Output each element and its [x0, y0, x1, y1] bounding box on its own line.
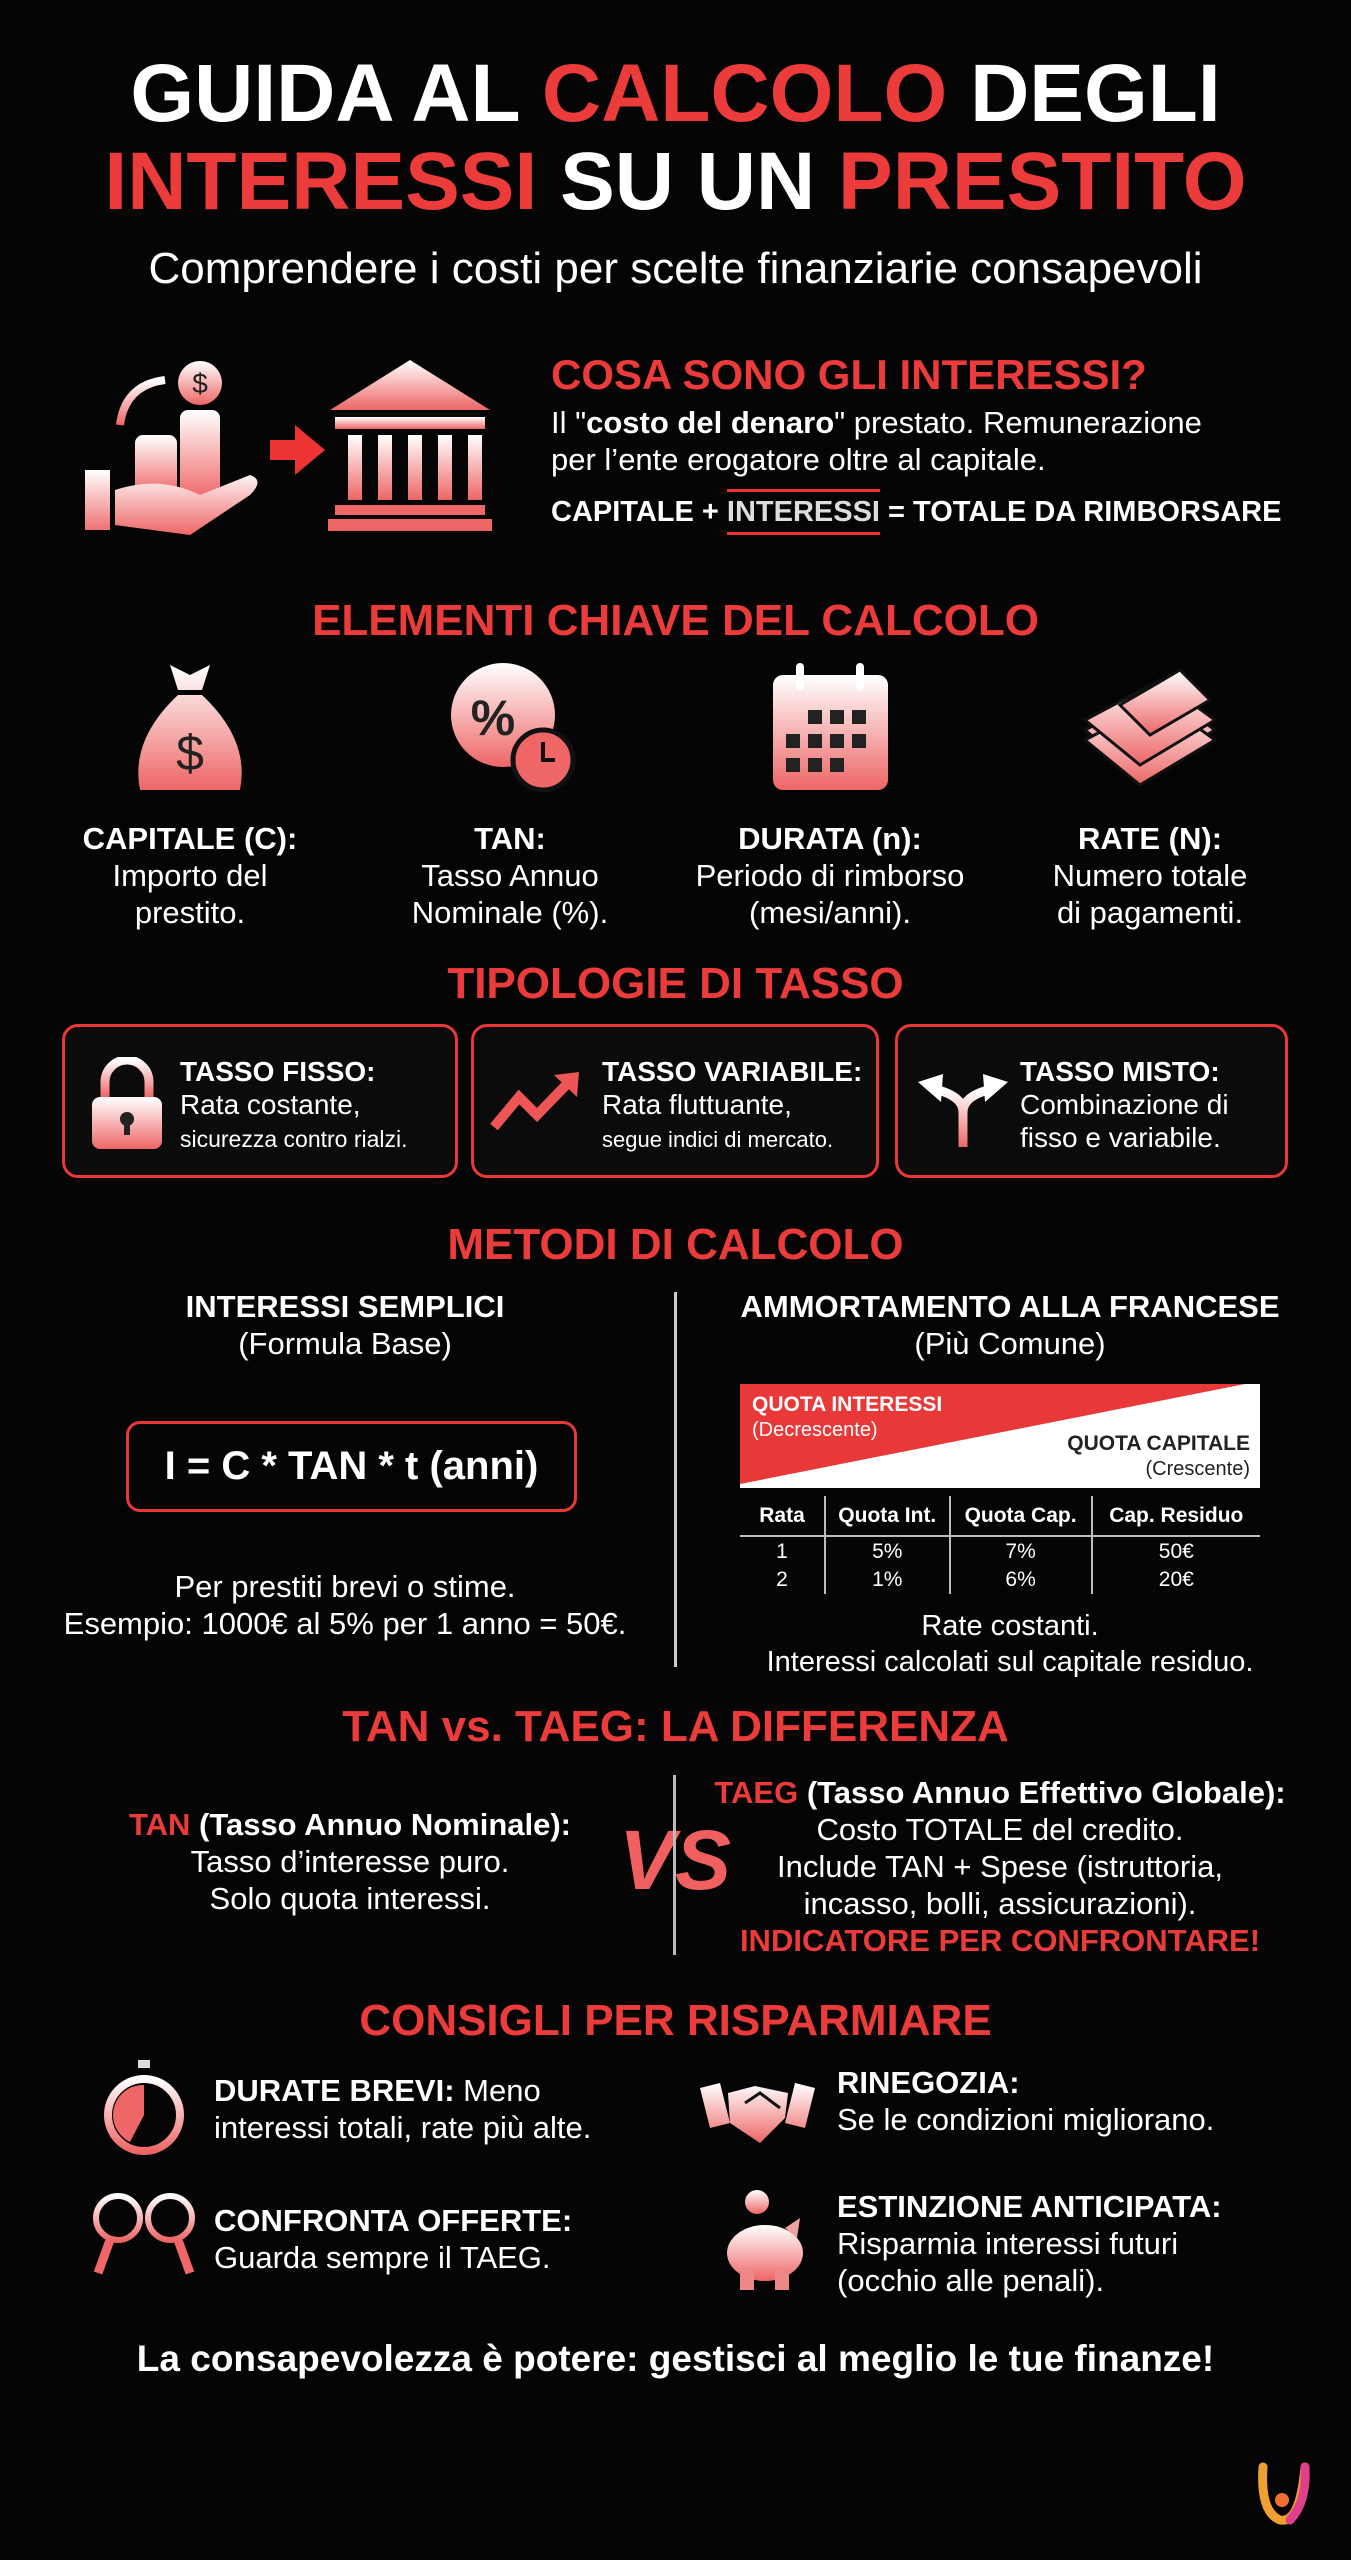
chart: triangle: QUOTA INTERESSI — [752, 1393, 942, 1416]
heading: ammortamento: AMMORTAMENTO ALLA FRANCESE — [740, 1289, 1280, 1324]
formula: CAPITALE + INTERESSI = TOTALE DA RIMBORSARE — [551, 496, 1281, 528]
item: capitale: Importo del — [112, 858, 268, 893]
text: misto — [1020, 1056, 1229, 1153]
heading: metodi di calcolo: METODI DI CALCOLO — [447, 1220, 904, 1269]
panel: taeg: Include TAN + Spese (istruttoria, — [777, 1849, 1223, 1884]
icon: split arrow — [918, 1074, 1008, 1147]
item: durata: Periodo di rimborso — [696, 858, 964, 893]
text: variabile: TASSO VARIABILE: — [602, 1056, 862, 1087]
text: misto: Combinazione di — [1020, 1089, 1229, 1120]
text: durate brevi: DURATE BREVI: Meno — [214, 2073, 541, 2108]
table: 2 — [776, 1568, 788, 1591]
title: GUIDA AL CALCOLO DEGLI — [130, 48, 1221, 139]
chart: triangle: QUOTA CAPITALE — [1067, 1432, 1250, 1455]
panel: tasso misto — [895, 1024, 1288, 1178]
text: misto: fisso e variabile. — [1020, 1122, 1221, 1153]
formula box: I = C * TAN * t (anni) — [165, 1444, 538, 1488]
icon: handshake — [700, 2083, 815, 2143]
text: fisso: sicurezza contro rialzi. — [180, 1126, 408, 1152]
text: confronta: CONFRONTA OFFERTE: — [214, 2203, 572, 2238]
panel: cosa sono gli interessi — [551, 351, 1281, 535]
divider line vs — [673, 1775, 676, 1955]
panel: tasso fisso — [62, 1024, 458, 1178]
title — [104, 48, 1247, 227]
icon: piggy bank — [727, 2190, 803, 2290]
item: capitale: prestito. — [135, 895, 245, 930]
panel: taeg: TAEG (Tasso Annuo Effettivo Globale): — [714, 1775, 1286, 1810]
text: estinzione: Risparmia interessi futuri — [837, 2226, 1178, 2261]
text: variabile — [602, 1056, 862, 1152]
table: Quota Int. — [838, 1504, 936, 1526]
heading: consigli: CONSIGLI PER RISPARMIARE — [359, 1996, 992, 2045]
heading: cosa sono: COSA SONO GLI INTERESSI? — [551, 351, 1147, 398]
item: capitale: $ — [176, 725, 204, 781]
formula box — [126, 1421, 577, 1512]
item: durata — [696, 663, 964, 930]
icon: hand with coins to bank: $ — [192, 368, 208, 399]
text: fisso: TASSO FISSO: — [180, 1056, 376, 1087]
table: 5% — [872, 1540, 902, 1562]
text: rate costanti: Interessi calcolati sul capitale residuo. — [767, 1646, 1253, 1678]
icon: vs: VS — [619, 1813, 731, 1907]
item: durata: DURATA (n): — [738, 821, 922, 856]
text: definition — [551, 405, 1202, 477]
tip: estinzione anticipata — [727, 2189, 1222, 2298]
table: 1 — [776, 1540, 788, 1562]
table: 50€ — [1159, 1540, 1194, 1562]
tip: durate brevi — [104, 2060, 591, 2155]
item: tan — [412, 663, 608, 930]
panel: taeg: Costo TOTALE del credito. — [816, 1812, 1184, 1847]
heading: tan vs taeg: TAN vs. TAEG: LA DIFFERENZA — [342, 1702, 1009, 1751]
table: 20€ — [1159, 1568, 1194, 1591]
table: Cap. Residuo — [1109, 1504, 1243, 1526]
panel: tan: TAN (Tasso Annuo Nominale): — [129, 1807, 571, 1842]
icon: lock — [92, 1057, 162, 1149]
icon: chart arrow — [490, 1072, 579, 1130]
chart: triangle: (Crescente) — [1146, 1458, 1250, 1480]
heading: interessi semplici: INTERESSI SEMPLICI — [186, 1289, 504, 1324]
item: tan: % — [470, 690, 515, 746]
heading: ammortamento — [740, 1289, 1280, 1361]
text: misto: TASSO MISTO: — [1020, 1056, 1220, 1087]
heading: ammortamento: (Più Comune) — [914, 1326, 1106, 1361]
item: capitale: CAPITALE (C): — [83, 821, 297, 856]
panel: taeg: incasso, bolli, assicurazioni). — [804, 1886, 1196, 1921]
icon: stopwatch — [104, 2060, 184, 2155]
text: confronta: Guarda sempre il TAEG. — [214, 2240, 551, 2275]
text: rinegozia: RINEGOZIA: — [837, 2065, 1020, 2100]
panel: elementi chiave — [83, 663, 1247, 930]
text: fisso — [180, 1056, 408, 1152]
panel: taeg: INDICATORE PER CONFRONTARE! — [740, 1923, 1260, 1958]
item: capitale — [83, 665, 297, 930]
table: 7% — [1005, 1540, 1036, 1562]
item: rate — [1053, 668, 1247, 930]
text: fisso: Rata costante, — [180, 1089, 361, 1120]
panel: interessi semplici — [64, 1289, 626, 1641]
item: tan: Tasso Annuo — [421, 858, 599, 893]
heading: tipologie di tasso: TIPOLOGIE DI TASSO — [447, 959, 904, 1008]
chart: triangle — [740, 1384, 1260, 1488]
chart: triangle: (Decrescente) — [752, 1419, 878, 1441]
text: rinegozia — [837, 2065, 1214, 2137]
table: Quota Cap. — [965, 1504, 1077, 1526]
text: estinzione — [837, 2189, 1222, 2298]
heading: interessi semplici: (Formula Base) — [238, 1326, 452, 1361]
title: INTERESSI SU UN PRESTITO — [104, 136, 1247, 227]
icon: hand with coins to bank — [85, 360, 492, 535]
closing statement: La consapevolezza è potere: gestisci al meglio le tue finanze! — [137, 2338, 1214, 2379]
text: variabile: segue indici di mercato. — [602, 1127, 833, 1152]
item: rate: RATE (N): — [1078, 821, 1222, 856]
item: tan: Nominale (%). — [412, 895, 608, 930]
icon: magnifiers — [93, 2193, 195, 2274]
item: durata: (mesi/anni). — [749, 895, 911, 930]
text: rinegozia: Se le condizioni migliorano. — [837, 2102, 1214, 2137]
text: definition: per l’ente erogatore oltre al capitale. — [551, 442, 1046, 477]
panel: ammortamento alla francese — [740, 1289, 1280, 1678]
text: rate costanti — [767, 1610, 1253, 1678]
table — [740, 1496, 1260, 1594]
text: example — [64, 1569, 626, 1641]
subtitle: Comprendere i costi per scelte finanziarie consapevoli — [148, 244, 1203, 293]
text: example: Per prestiti brevi o stime. — [174, 1569, 516, 1604]
text: estinzione: (occhio alle penali). — [837, 2263, 1104, 2298]
text: example: Esempio: 1000€ al 5% per 1 anno = 50€. — [64, 1606, 626, 1641]
icon: logo — [1258, 2462, 1310, 2525]
panel: tasso variabile — [471, 1024, 879, 1178]
heading: elementi chiave: ELEMENTI CHIAVE DEL CALCOLO — [312, 596, 1039, 645]
item: rate: Numero totale — [1053, 858, 1247, 893]
text: rate costanti: Rate costanti. — [921, 1610, 1099, 1642]
table: 1% — [872, 1568, 902, 1591]
text: confronta — [214, 2203, 572, 2275]
table: Rata — [759, 1504, 805, 1526]
divider — [674, 1292, 677, 1667]
text: durate brevi: interessi totali, rate più alte. — [214, 2110, 591, 2145]
text: durate brevi — [214, 2073, 591, 2145]
tip: confronta offerte — [93, 2193, 572, 2275]
item: tan: TAN: — [474, 821, 546, 856]
tip: rinegozia — [700, 2065, 1214, 2143]
panel: tan: Tasso d’interesse puro. — [191, 1844, 509, 1879]
text: definition: Il "costo del denaro" prestato. Remunerazione — [551, 405, 1202, 440]
heading: interessi semplici — [186, 1289, 504, 1361]
text: variabile: Rata fluttuante, — [602, 1089, 792, 1120]
item: rate: di pagamenti. — [1057, 895, 1243, 930]
panel: tan — [129, 1807, 571, 1916]
table: 6% — [1005, 1568, 1036, 1591]
panel: tan: Solo quota interessi. — [210, 1881, 490, 1916]
panel: taeg — [714, 1775, 1286, 1958]
text: estinzione: ESTINZIONE ANTICIPATA: — [837, 2189, 1222, 2224]
